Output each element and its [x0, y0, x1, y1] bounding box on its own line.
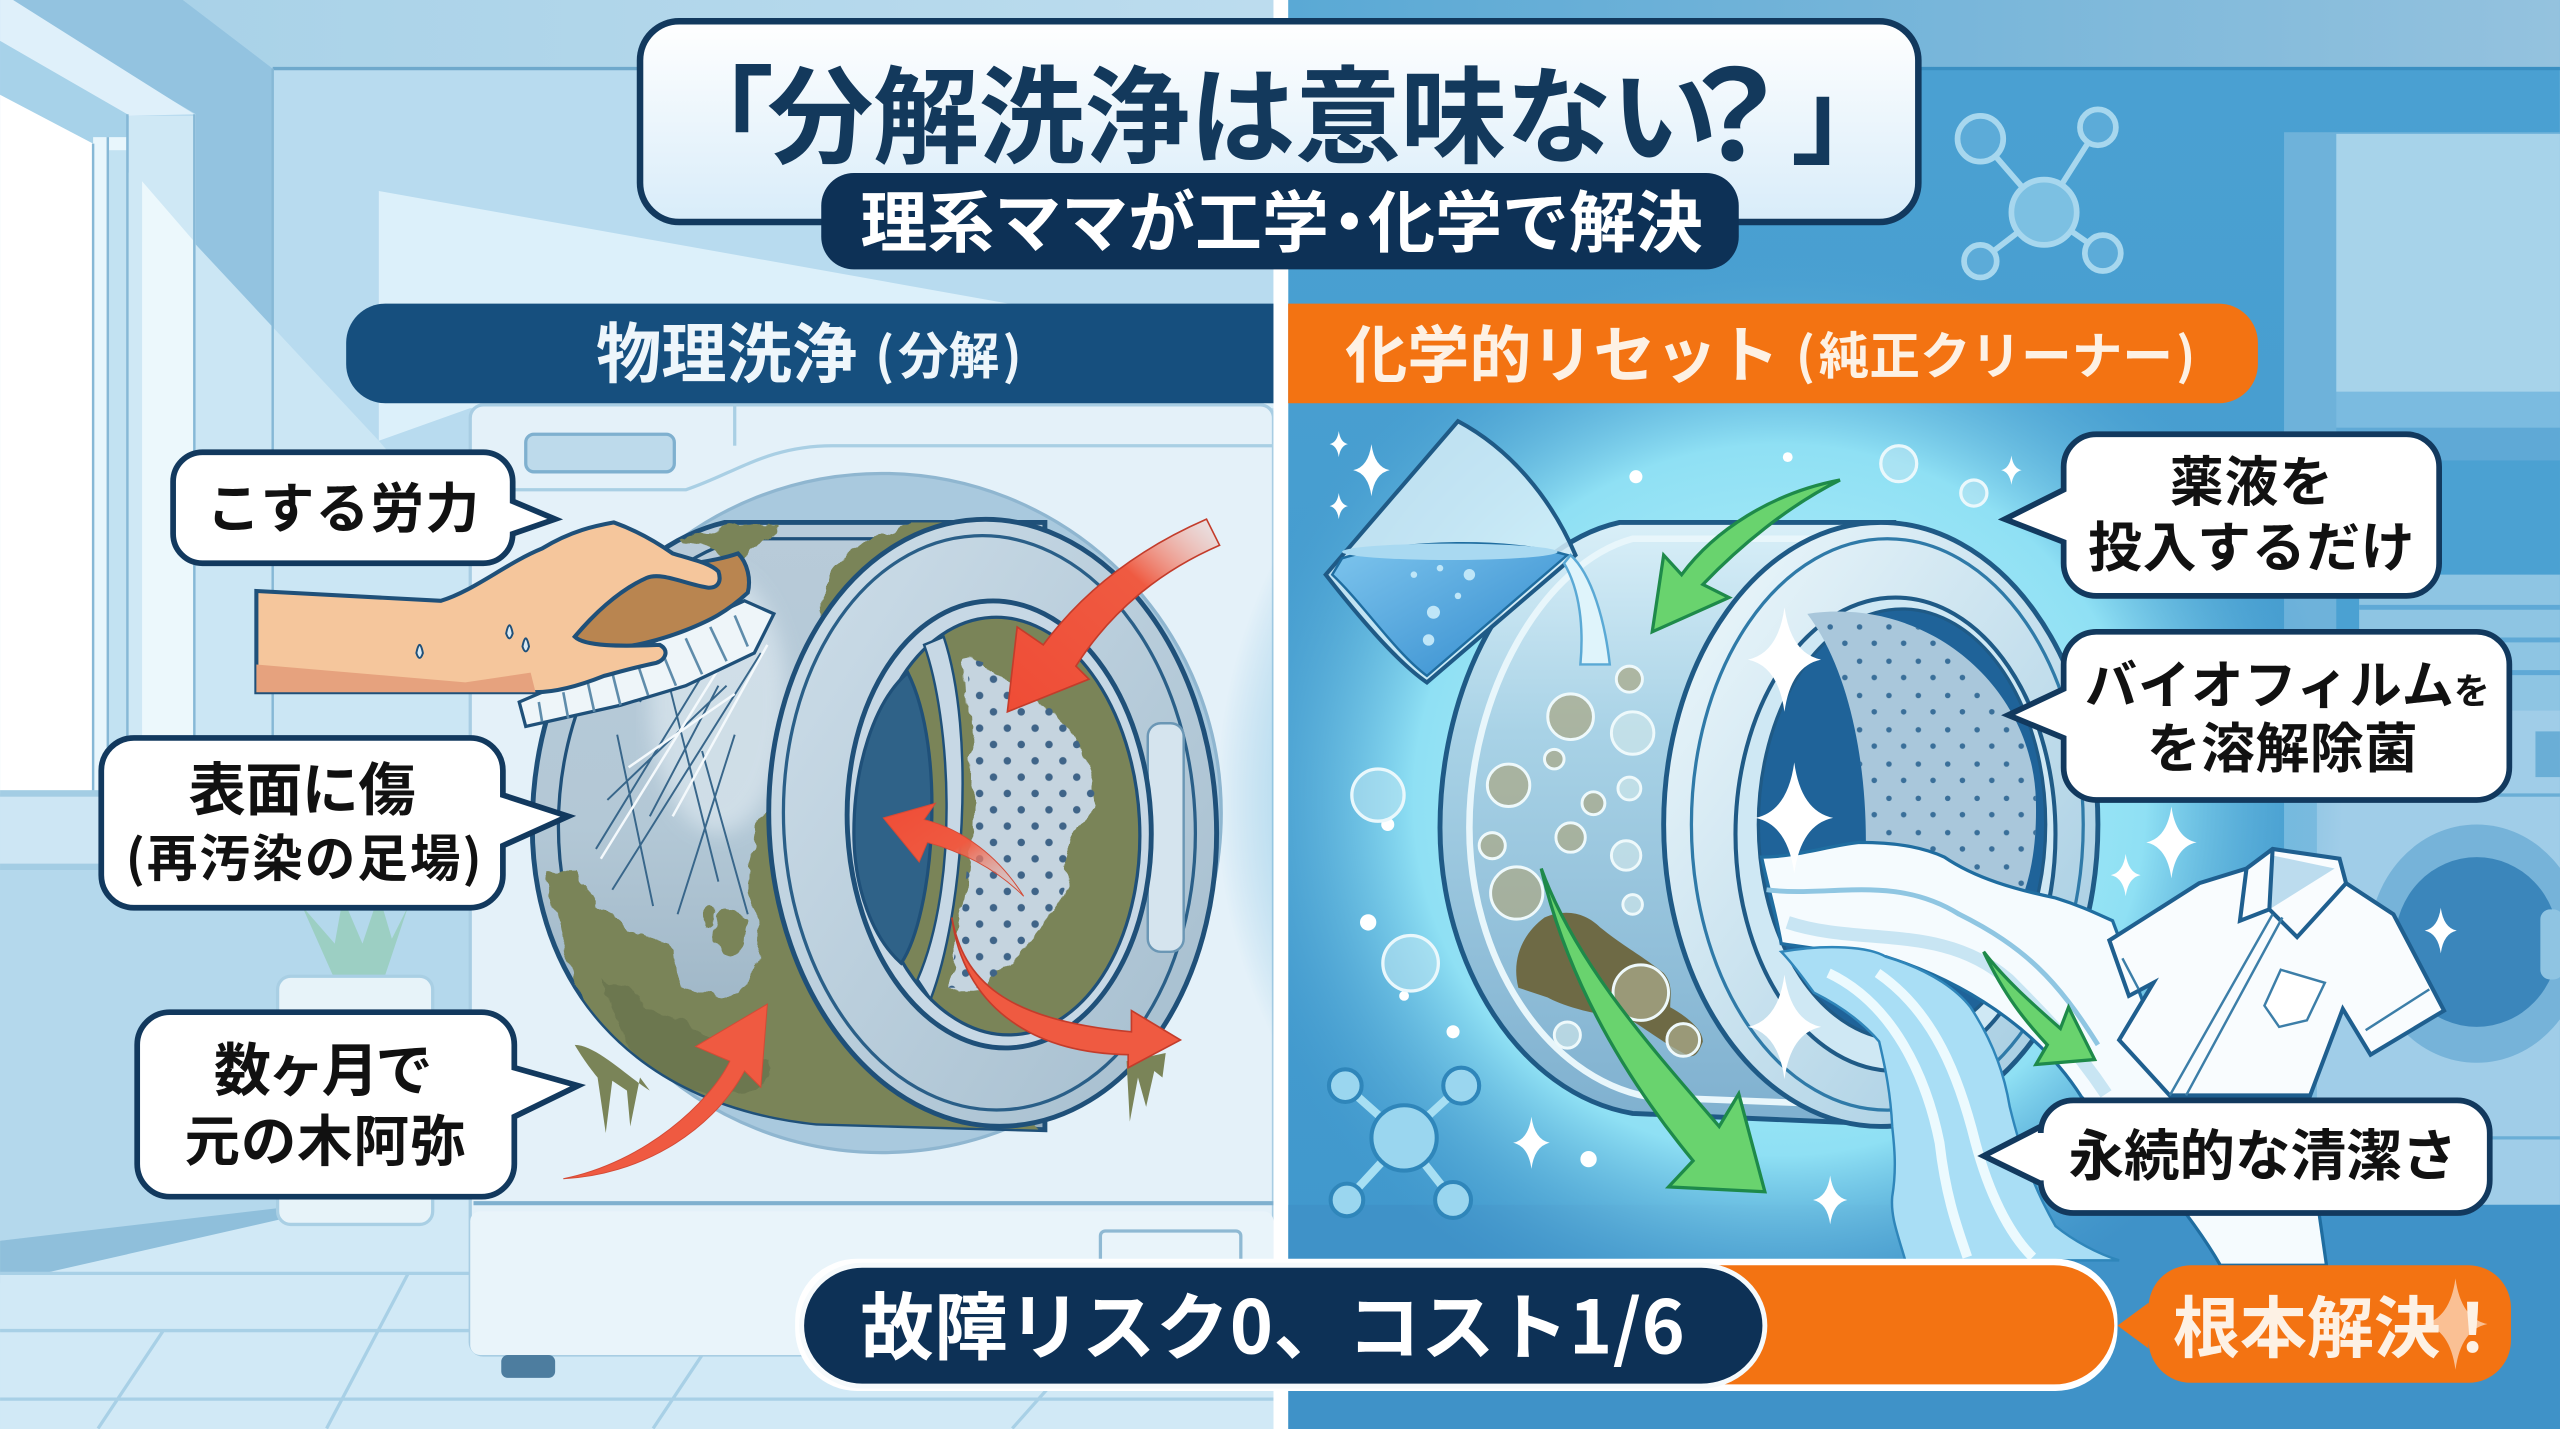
sparkles and floating bubbles [1330, 431, 2457, 1224]
subtitle banner: 化学で解決 [1368, 170, 1703, 267]
callout: dissolves biofilm: を溶解除菌 [2147, 705, 2418, 783]
center divider [1273, 0, 1288, 1429]
panel header: chemical reset: ( [1796, 315, 1815, 389]
panel header: chemical reset [1288, 304, 2258, 403]
mold on drum [547, 519, 1045, 1143]
water and cloth flow [1762, 842, 2326, 1265]
clean drum [1440, 522, 2098, 1126]
bottom result bar [795, 1259, 2118, 1391]
callout: lasting cleanliness: 永続的な清潔さ [2069, 1111, 2457, 1191]
panel header: physical cleaning: 物理洗浄 [596, 301, 857, 396]
subtitle banner: ・ [1316, 170, 1383, 267]
callout: just add solution: 薬液を [2170, 439, 2333, 517]
potted plant [278, 895, 433, 1224]
panel header: chemical reset: 化学的リセット [1345, 305, 1779, 395]
callout: surface scratches: (再汚染の足場) [126, 818, 482, 892]
dirty drum [532, 508, 1232, 1143]
panel header: physical cleaning: 分解 [898, 315, 999, 389]
bubbles inside drum [1479, 666, 1700, 1056]
molecule: top right [1958, 109, 2121, 278]
callout: root solution [2118, 1265, 2511, 1383]
mold drips [575, 1045, 1166, 1133]
callout: dissolves biofilm [2008, 632, 2509, 800]
panel header: physical cleaning: ) [1002, 315, 1022, 389]
callout: surface scratches: 表面に傷 [189, 745, 416, 827]
perforated inner wall [947, 660, 1097, 988]
red arrows on dirty drum [563, 519, 1220, 1179]
panel header: physical cleaning: ( [875, 315, 894, 389]
main title: 」 [1791, 32, 1897, 186]
bottom result bar: 故障リスク0、コスト1/6 [860, 1269, 1685, 1375]
measuring cup pouring liquid [1326, 421, 1610, 682]
callout: scrubbing effort [173, 452, 555, 563]
right scene background: room [1216, 0, 2560, 1429]
subtitle banner [821, 170, 1739, 269]
icon: sparkle behind exclamation [2423, 1278, 2487, 1370]
callout: root solution: ！ [2439, 1275, 2506, 1372]
callout: lasting cleanliness [1984, 1100, 2490, 1213]
callout: just add solution [2005, 434, 2439, 596]
green arrows [1541, 480, 2095, 1192]
callout: scrubbing effort: こする労力 [207, 465, 479, 543]
main title: ？ [1672, 16, 1796, 196]
dark cavity [854, 673, 932, 963]
panel header: chemical reset: ) [2176, 315, 2195, 389]
title panel [640, 16, 1918, 222]
main title: 「 [668, 32, 774, 186]
callout: back to square one: 数ヶ月で [214, 1026, 433, 1108]
left washing machine body [470, 403, 1273, 1378]
grey ring [753, 508, 1232, 1138]
subtitle banner: 理系ママが工学 [860, 170, 1329, 267]
scratches on drum [596, 563, 761, 914]
callout: just add solution: 投入するだけ [2088, 505, 2415, 583]
callout: back to square one [137, 1012, 578, 1197]
clean white shirt [2109, 849, 2444, 1095]
perforated inner wall [1807, 612, 2036, 963]
biofilm stains [1516, 913, 1703, 1056]
callout: root solution: 根本解決 [2173, 1275, 2441, 1372]
left scene background: room [0, 0, 1273, 1429]
main title: 分解洗浄は意味ない [767, 32, 1718, 186]
panel header: chemical reset: 純正クリーナー [1819, 315, 2173, 389]
blue ring [1664, 522, 2098, 1126]
callout: surface scratches [101, 738, 568, 908]
molecule: bottom left [1329, 1068, 1479, 1218]
callout: dissolves biofilm: を [2454, 663, 2490, 715]
callout: dissolves biofilm: バイオフィルム [2085, 644, 2454, 720]
callout: back to square one: 元の木阿弥 [185, 1097, 465, 1177]
panel header: physical cleaning [346, 301, 1273, 403]
hand scrubbing with brush [256, 522, 774, 726]
